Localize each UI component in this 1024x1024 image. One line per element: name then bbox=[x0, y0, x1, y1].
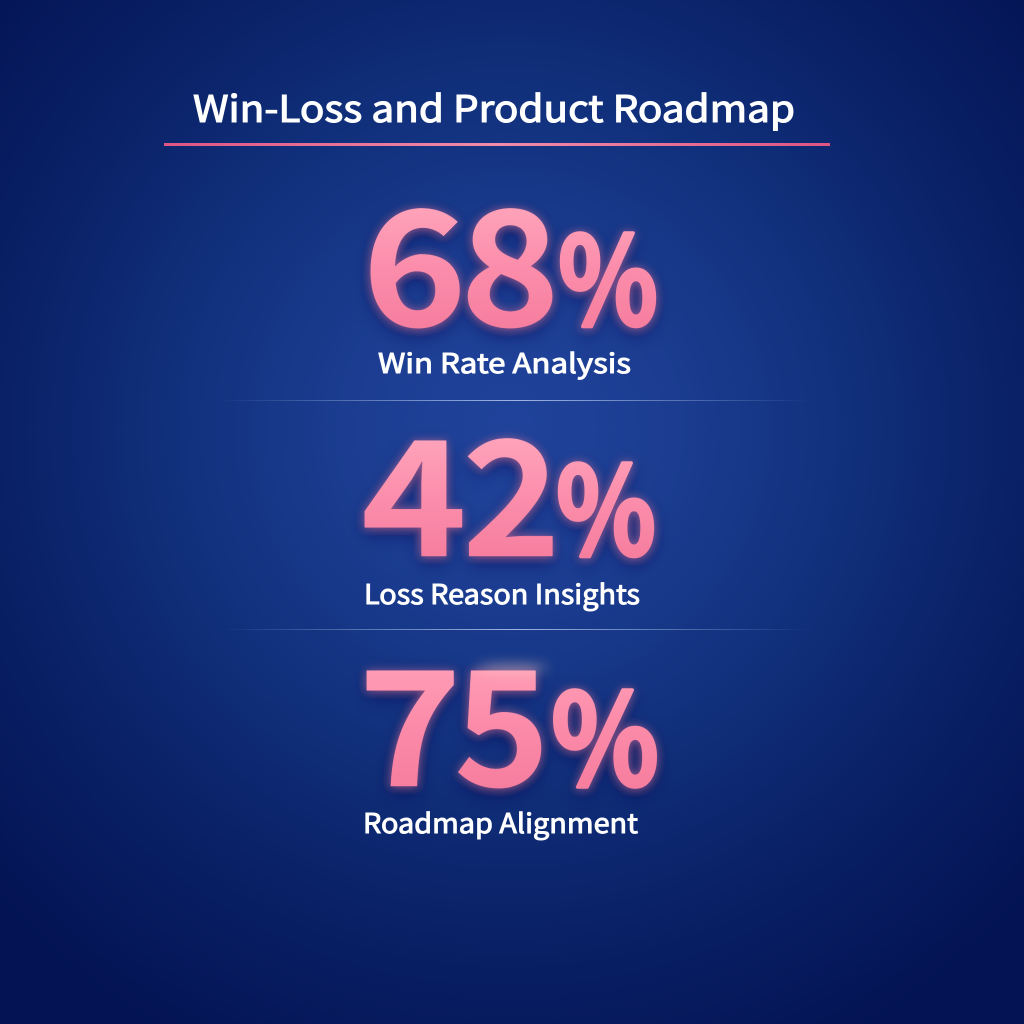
stat: 68%: 8 bbox=[460, 141, 560, 373]
stat: 75%: % bbox=[551, 640, 659, 822]
label: roadmap alignment: Roadmap Alignment bbox=[363, 802, 638, 841]
stat: 42%: 2 bbox=[462, 371, 561, 603]
stat: 42%: 4 bbox=[361, 371, 467, 603]
label: win rate: Win Rate Analysis bbox=[378, 342, 631, 381]
stat: 75%: 7 bbox=[358, 601, 462, 833]
stat: 42% bbox=[361, 371, 656, 603]
stat: 68%: 6 bbox=[362, 141, 467, 373]
label: loss reason: Loss Reason Insights bbox=[364, 573, 640, 612]
stat: 75%: 5 bbox=[454, 601, 550, 833]
title underline bbox=[164, 143, 830, 146]
stat: 68%: % bbox=[558, 184, 658, 361]
stat: 75% bbox=[358, 601, 659, 833]
stat: 42%: % bbox=[556, 414, 656, 591]
title: Win-Loss and Product Roadmap bbox=[193, 79, 795, 133]
stat: 68% bbox=[362, 141, 658, 373]
